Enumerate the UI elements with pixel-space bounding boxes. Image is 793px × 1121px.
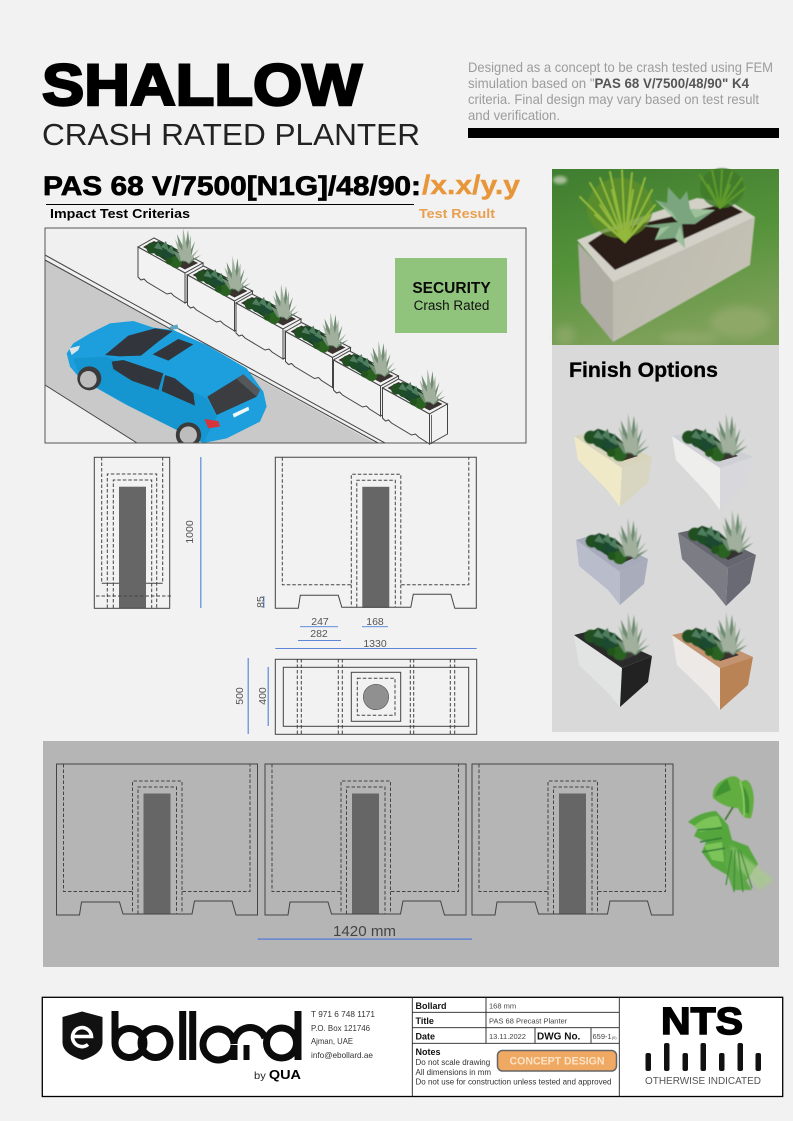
finish heading: Finish Options [569, 359, 718, 382]
drawing info table: 13.11.2022 [489, 1032, 526, 1041]
security label: Crash Rated [414, 298, 489, 313]
intro paragraph: simulation based on "PAS 68 V/7500/48/90" K4 [468, 75, 749, 91]
notes [416, 1047, 612, 1086]
intro paragraph: criteria. Final design may vary based on test result [468, 91, 759, 107]
logo wordmark [115, 1011, 298, 1060]
NTS scale: OTHERWISE INDICATED [645, 1076, 761, 1087]
dimension: 400 [257, 667, 269, 726]
drawing info table: 659-1(0) [592, 1032, 617, 1041]
finish: white and copper [672, 612, 753, 710]
drawing info table: Title [416, 1016, 434, 1026]
notes: Notes [416, 1047, 441, 1057]
dimension: 247: 247 [311, 616, 329, 628]
drawing info table: 168 mm [489, 1002, 516, 1010]
contact details: P.O. Box 121746 [311, 1023, 370, 1033]
panel: finish options [552, 345, 779, 732]
black header bar [468, 128, 779, 138]
intro paragraph: Designed as a concept to be crash tested using FEM [468, 59, 773, 75]
dimension: 168: 168 [366, 616, 384, 628]
drawing info table: Bollard [416, 1001, 447, 1011]
logo: ebollard [62, 1011, 302, 1082]
NTS scale: NTS [661, 1001, 743, 1043]
road [45, 260, 375, 443]
drawing info table: PAS 68 Precast Planter [489, 1016, 568, 1026]
intro paragraph [468, 59, 773, 123]
drawing: front elevation [275, 457, 476, 608]
agave [642, 187, 715, 248]
notes: Do not use for construction unless tested and approved [416, 1078, 612, 1086]
concept design stamp: CONCEPT DESIGN [510, 1056, 605, 1068]
drawing info table [412, 997, 619, 1096]
rating code: /x.x/y.y [422, 170, 520, 200]
panel: planter photo [552, 168, 779, 345]
dimension: 247 [300, 616, 338, 628]
rating underline [46, 204, 414, 205]
notes: Do not scale drawing [416, 1058, 490, 1067]
rating code: PAS 68 V/7500[N1G]/48/90: [43, 171, 421, 201]
drawing: plan view [275, 659, 477, 734]
title: SHALLOW: SHALLOW [42, 53, 362, 118]
test result label: Test Result [419, 206, 496, 221]
security label: SECURITY [412, 280, 491, 297]
dimension: 282: 282 [310, 628, 328, 640]
path patch [553, 176, 567, 184]
subtitle: CRASH RATED PLANTER [42, 117, 420, 152]
concept design stamp [498, 1050, 616, 1071]
finish: white and black [574, 612, 652, 707]
dimension: 282 [298, 628, 341, 641]
scale bars icon [646, 1043, 761, 1071]
dimension: 168 [362, 616, 388, 628]
drawing info table: Date [416, 1032, 435, 1042]
notes: All dimensions in mm [416, 1068, 491, 1077]
dimension: 1000: 1000 [184, 520, 196, 544]
icon: tropical leaves [688, 776, 774, 892]
elevation: left planter [56, 764, 258, 915]
finish: light grey [576, 518, 648, 605]
panel: installation spacing [43, 741, 779, 967]
panel: footer title block [42, 997, 783, 1096]
contact details: Ajman, UAE [311, 1036, 353, 1046]
dimension: 85: 85 [255, 596, 267, 608]
dimension: 500: 500 [234, 687, 246, 705]
contact details: T 971 6 748 1171 [311, 1009, 375, 1019]
finish: white [672, 413, 753, 510]
security label [395, 258, 507, 333]
finish: dark grey [678, 510, 756, 606]
rating code [43, 170, 520, 201]
NTS scale [645, 1001, 761, 1087]
drawing info table: DWG No. [537, 1032, 581, 1042]
dimension: 1330: 1330 [363, 638, 387, 650]
intro paragraph: and verification. [468, 107, 560, 123]
plant masses [587, 178, 653, 238]
drawing: side elevation [94, 457, 171, 608]
panel: street scene [45, 228, 526, 444]
logo byline: by QUA [254, 1067, 302, 1082]
elevation: right planter [472, 764, 673, 915]
grass plants [580, 170, 745, 242]
finish: cream [574, 413, 652, 507]
contact details: info@ebollard.ae [311, 1050, 373, 1060]
row of planters [138, 228, 448, 444]
dimension: 500 [234, 658, 249, 734]
dimension: 400: 400 [257, 687, 269, 705]
blue car [67, 321, 267, 443]
dimension: 1420 mm: 1420 mm [333, 923, 396, 940]
elevation: middle planter [265, 764, 466, 915]
logo shield [62, 1012, 102, 1060]
contact details [311, 1009, 375, 1060]
impact test criterias label: Impact Test Criterias [50, 206, 190, 221]
